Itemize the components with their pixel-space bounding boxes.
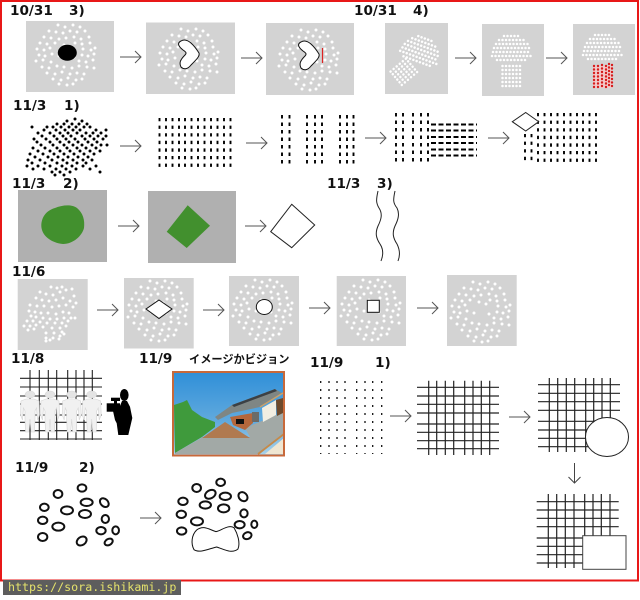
panel: 11/6 square	[337, 276, 406, 346]
illustration: grid with figures and cameraman	[20, 370, 132, 440]
arrow	[488, 132, 509, 144]
arrow	[97, 304, 118, 316]
panel: 10/31 3) dots with black ellipse	[26, 21, 114, 92]
heading: 10/31 4): 4)	[413, 3, 429, 19]
heading: 11/9 2): 2)	[79, 460, 95, 476]
arrow	[309, 302, 330, 314]
chart: three bundles of dashes	[282, 115, 354, 165]
arrow	[390, 410, 411, 422]
chart: line grid	[417, 381, 499, 455]
arrow	[365, 132, 386, 144]
heading: 11/9 image or vision: 11/9	[139, 351, 172, 367]
arrow	[245, 220, 266, 232]
url footer: https://sora.ishikami.jp	[8, 580, 176, 594]
chart: line grid with rectangle	[537, 494, 626, 569]
chart: sorted vertical dashes	[160, 118, 230, 167]
chart: scattered ovals	[38, 484, 119, 547]
panel: mushroom with red stem	[573, 24, 635, 95]
arrow	[241, 52, 262, 64]
shape: two wavy lines	[376, 191, 399, 261]
arrow	[417, 302, 438, 314]
chart: dot grid	[321, 381, 382, 454]
arrow	[455, 52, 476, 64]
arrow	[120, 51, 141, 63]
heading: 10/31 3): 3)	[69, 3, 85, 19]
panel: 11/6 diamond	[124, 278, 194, 348]
chart: dashes with diamond	[512, 112, 596, 162]
heading: 11/3 2): 11/3	[12, 176, 45, 192]
heading: 11/3 1): 1)	[64, 98, 80, 114]
heading: 11/9 image or vision: イメージかビジョン	[189, 352, 289, 366]
shape: diamond outline	[271, 204, 315, 248]
panel: 11/6 irregular dots	[18, 279, 88, 350]
arrow	[509, 411, 530, 423]
arrow	[546, 52, 567, 64]
panel: 11/6 dots only	[447, 275, 517, 346]
panel: mushroom upright	[482, 24, 544, 96]
heading: 11/9 2): 11/9	[15, 460, 48, 476]
heading: 11/3 1): 11/3	[13, 98, 46, 114]
arrow	[140, 512, 161, 524]
chart: scattered ovals with blob	[177, 479, 257, 551]
panel: green diamond	[148, 191, 236, 263]
arrow: down	[568, 463, 580, 483]
panel: mushroom tilted	[385, 23, 448, 94]
arrow	[246, 137, 267, 149]
chart: vertical and horizontal dashes	[396, 113, 477, 163]
heading: 11/6: 11/6	[12, 264, 45, 280]
heading: 11/3 3): 11/3	[327, 176, 360, 192]
heading: 11/9 1): 11/9	[310, 355, 343, 371]
photo: house roof and trees	[173, 372, 284, 456]
heading: 11/8: 11/8	[11, 351, 44, 367]
panel: 10/31 3) chevron with red line	[266, 23, 354, 95]
arrow	[118, 220, 139, 232]
arrow	[120, 140, 141, 152]
heading: 10/31 4): 10/31	[354, 3, 397, 19]
heading: 11/9 1): 1)	[375, 355, 391, 371]
heading: 11/3 2): 2)	[63, 176, 79, 192]
panel: 11/6 circle	[229, 276, 299, 346]
panel: 10/31 3) chevron outline	[146, 22, 235, 94]
chart: scattered black dots	[27, 119, 107, 175]
panel: green blob	[18, 190, 107, 262]
chart: line grid with circle	[538, 378, 628, 456]
arrow	[203, 304, 224, 316]
heading: 11/3 3): 3)	[377, 176, 393, 192]
heading: 10/31 3): 10/31	[10, 3, 53, 19]
